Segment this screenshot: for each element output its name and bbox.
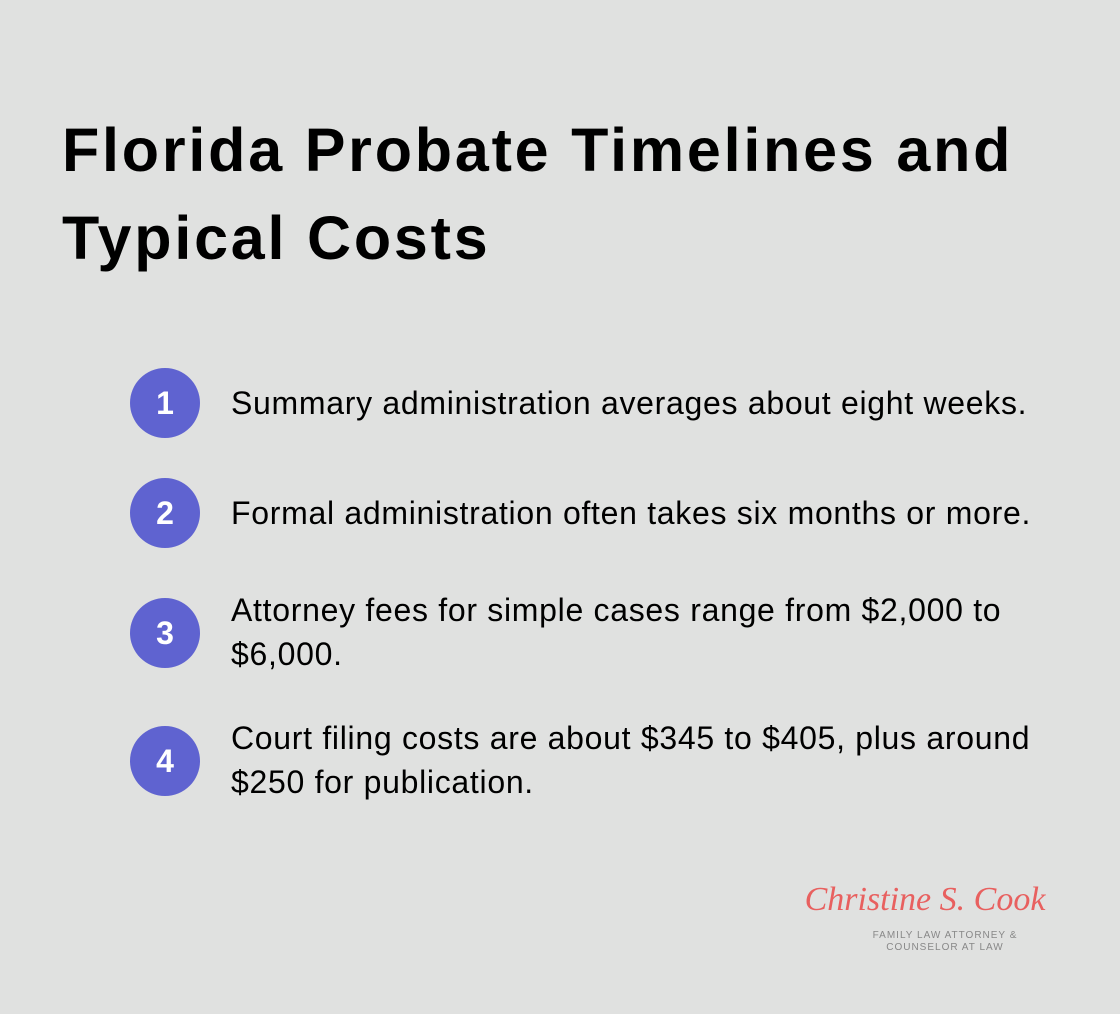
number badge 4: 4	[156, 743, 174, 779]
text 4: Court filing costs are about $345 to $405, plus around	[231, 720, 1030, 756]
number badge 4	[130, 726, 200, 796]
text 3	[231, 592, 1001, 672]
text 4: $250 for publication.	[231, 764, 534, 800]
item 3	[130, 592, 1001, 672]
logo	[805, 881, 1046, 953]
title: Typical Costs	[62, 204, 490, 272]
number badge 2: 2	[156, 495, 174, 531]
logo: Christine S. Cook	[805, 881, 1045, 918]
text 3: Attorney fees for simple cases range from $2,000 to	[231, 592, 1001, 628]
text 2: Formal administration often takes six months or more.	[231, 495, 1031, 531]
logo: FAMILY LAW ATTORNEY &	[873, 930, 1017, 941]
item 4	[130, 720, 1030, 800]
number badge 2	[130, 478, 200, 548]
number badge 1: 1	[156, 385, 174, 421]
number badge 3	[130, 598, 200, 668]
item 1	[130, 368, 1027, 438]
title	[62, 116, 1013, 272]
item 2	[130, 478, 1031, 548]
number badge 1	[130, 368, 200, 438]
number badge 3: 3	[156, 615, 174, 651]
text 1: Summary administration averages about eight weeks.	[231, 385, 1027, 421]
text 3: $6,000.	[231, 636, 343, 672]
title: Florida Probate Timelines and	[62, 116, 1013, 184]
text 4	[231, 720, 1030, 800]
logo: COUNSELOR AT LAW	[886, 942, 1004, 953]
